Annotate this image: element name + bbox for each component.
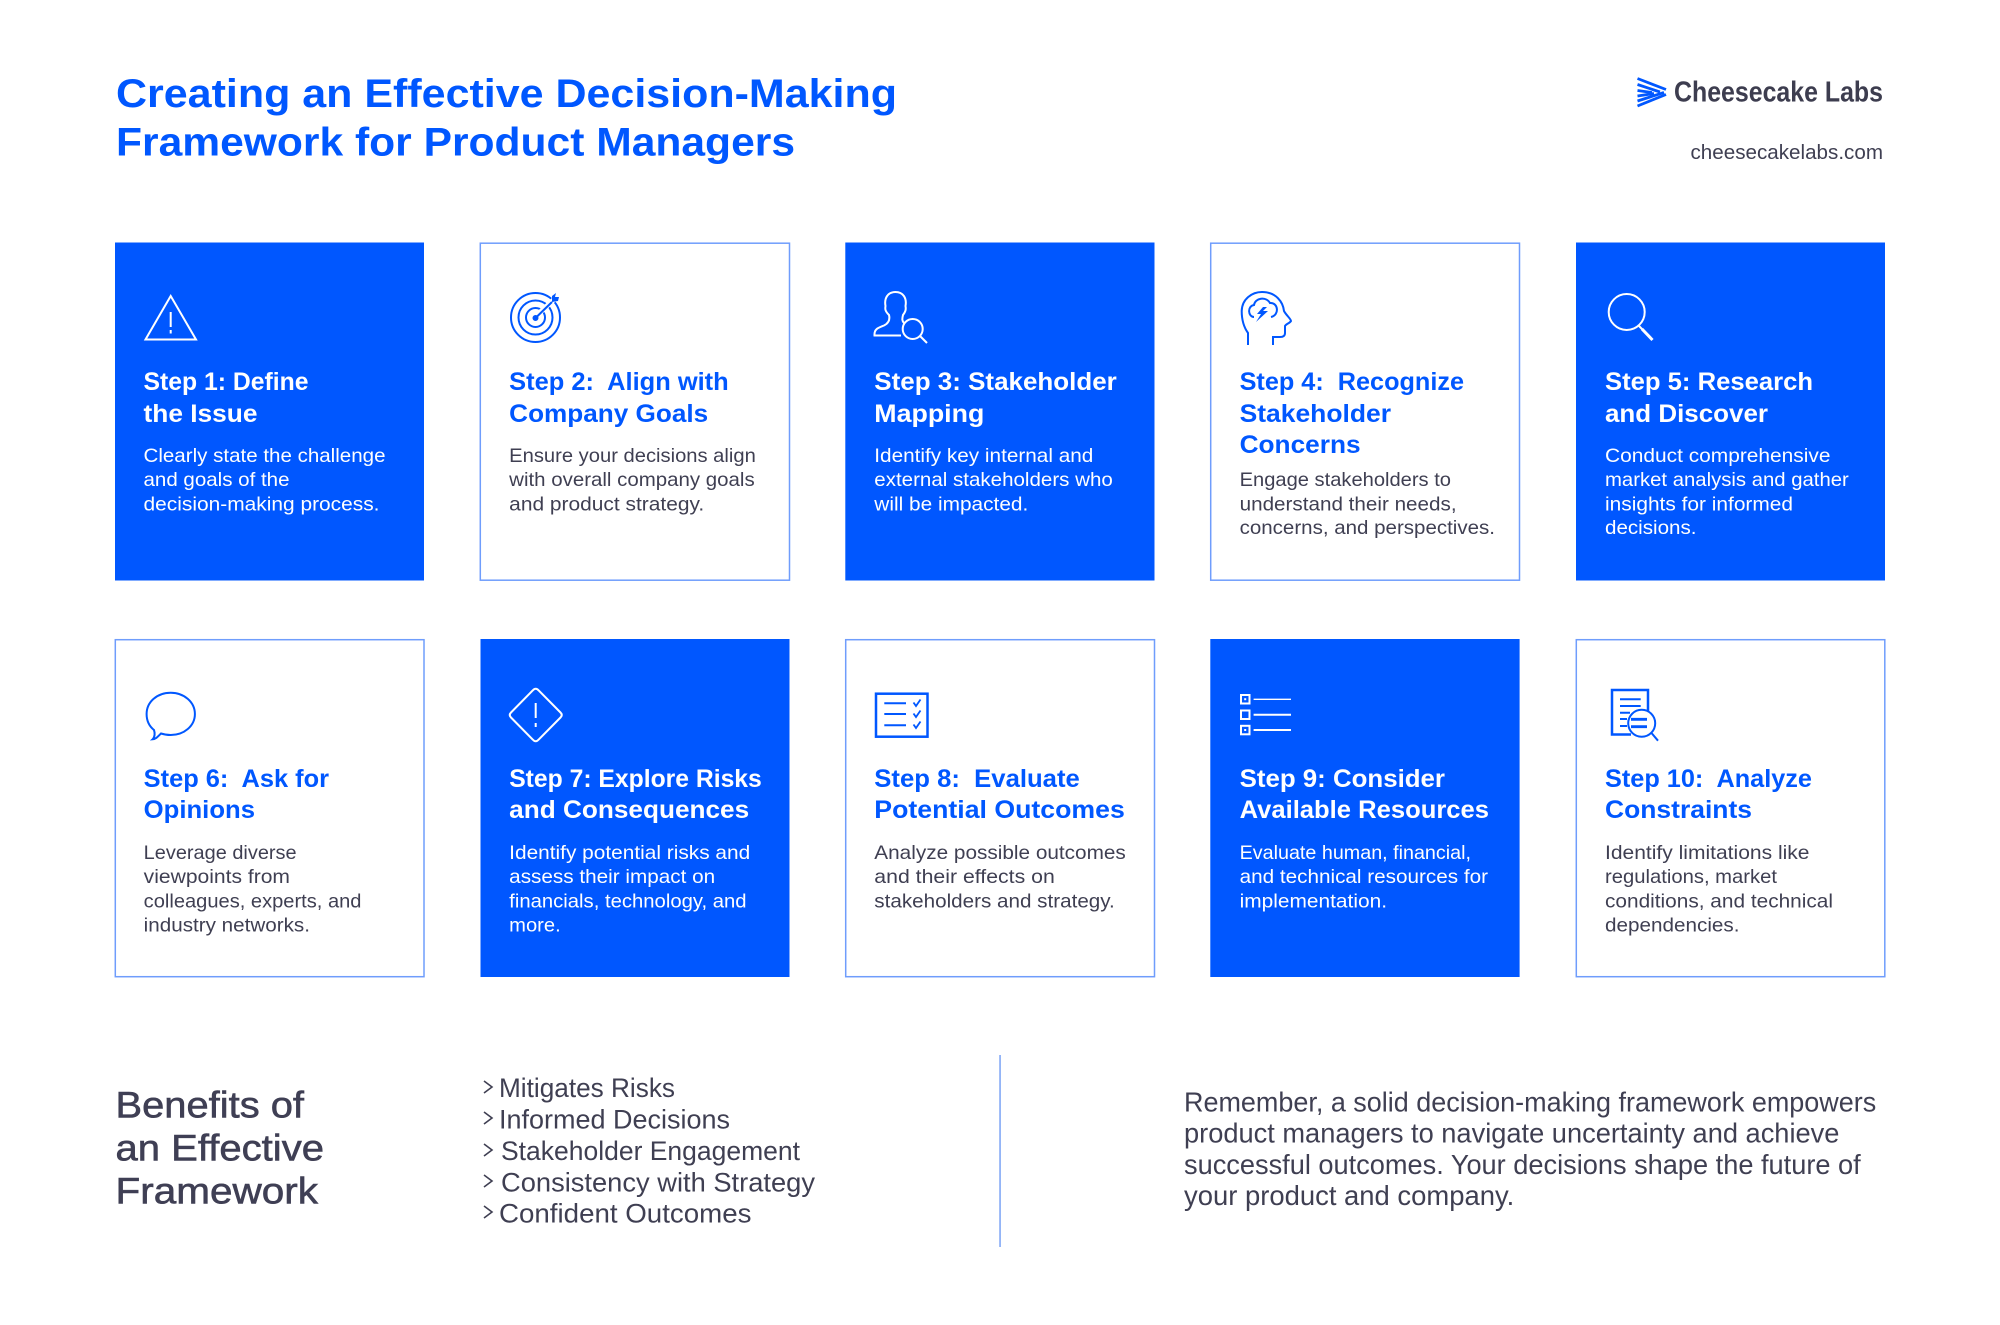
panel: step 10	[1576, 640, 1885, 977]
text: step 4 description: understand their needs,	[1240, 494, 1457, 516]
heading: step 4: Concerns	[1240, 431, 1361, 459]
heading: step 8	[874, 765, 1125, 824]
text: step 3 description: external stakeholders who	[874, 469, 1113, 491]
heading: step 9	[1240, 765, 1489, 824]
title	[116, 72, 897, 164]
text: step 10 description: conditions, and technical	[1605, 890, 1833, 912]
heading: step 2: Company Goals	[509, 400, 708, 428]
heading: step 5: Step 5: Research	[1605, 368, 1813, 396]
text: closing paragraph: successful outcomes. Your decisions shape the future of	[1184, 1149, 1861, 1180]
text: step 5 description: Conduct comprehensive	[1605, 445, 1830, 467]
text: step 3 description: Identify key internal and	[874, 445, 1093, 467]
text: step 5 description: insights for informed	[1605, 494, 1793, 516]
text: step 2 description	[508, 445, 756, 516]
heading: step 4: Stakeholder	[1240, 400, 1391, 428]
text: step 9 description: Evaluate human, financial,	[1240, 842, 1471, 864]
icon: warning triangle	[146, 296, 196, 340]
heading: step 1	[144, 368, 309, 428]
text: step 1 description: and goals of the	[144, 469, 290, 491]
heading: step 7: and Consequences	[509, 796, 749, 824]
text: step 10 description: Identify limitations like	[1605, 842, 1810, 864]
text: step 8 description	[874, 842, 1126, 912]
text: step 6 description: viewpoints from	[144, 866, 290, 888]
icon: speech bubble	[147, 693, 195, 739]
heading: step 1: the Issue	[144, 400, 258, 428]
text: closing paragraph	[1184, 1086, 1876, 1211]
text: closing paragraph: your product and company.	[1184, 1180, 1514, 1211]
heading: step 8: Potential Outcomes	[874, 796, 1125, 824]
text: step 10 description: regulations, market	[1605, 866, 1778, 888]
icon: target	[511, 293, 560, 342]
panel: step 9	[1210, 639, 1520, 977]
heading: step 3	[874, 368, 1117, 428]
icon: person with magnifier	[874, 292, 927, 343]
text: step 6 description	[144, 842, 362, 937]
heading: step 2: Step 2: Align with	[509, 368, 729, 396]
heading: step 5	[1605, 368, 1813, 428]
heading: step 6: Opinions	[144, 796, 255, 824]
text: step 3 description: will be impacted.	[873, 494, 1028, 516]
panel: step 5	[1576, 242, 1885, 580]
text: step 7 description	[509, 842, 750, 937]
panel: step 7	[480, 639, 790, 977]
icon: list chevrons	[484, 1081, 492, 1218]
text: step 2 description: with overall company goals	[508, 469, 755, 491]
text: step 4 description	[1240, 469, 1495, 539]
panel: step 6	[115, 640, 424, 977]
text: step 4 description: concerns, and perspectives.	[1240, 517, 1495, 539]
list: benefits: Informed Decisions	[499, 1104, 730, 1134]
text: step 8 description: Analyze possible outcomes	[874, 842, 1126, 864]
list: benefits: Consistency with Strategy	[501, 1168, 816, 1198]
list: benefits	[484, 1073, 816, 1228]
panel: step 4	[1211, 243, 1520, 580]
title: Creating an Effective Decision-Making	[116, 72, 897, 116]
heading: step 9: Available Resources	[1240, 796, 1489, 824]
text: closing paragraph: Remember, a solid decision-making framework empowers	[1184, 1086, 1876, 1118]
text: step 10 description	[1605, 842, 1833, 937]
text: step 2 description: and product strategy.	[509, 494, 704, 516]
icon: document with magnifier	[1612, 690, 1658, 741]
text: closing paragraph: product managers to navigate uncertainty and achieve	[1184, 1118, 1839, 1148]
list: benefits: Confident Outcomes	[499, 1198, 752, 1228]
heading: benefits: Benefits of	[116, 1084, 305, 1126]
panel: step 1	[115, 242, 424, 580]
heading: step 4: Step 4: Recognize	[1240, 368, 1464, 396]
title: Framework for Product Managers	[116, 120, 795, 164]
text: step 2 description: Ensure your decisions align	[509, 445, 756, 467]
heading: benefits	[116, 1084, 324, 1212]
heading: step 3: Mapping	[874, 400, 984, 428]
text: step 1 description	[144, 445, 386, 516]
text: step 7 description: assess their impact on	[509, 866, 715, 888]
heading: step 8: Step 8: Evaluate	[874, 765, 1080, 793]
text: step 7 description: financials, technology, and	[509, 890, 747, 912]
text: step 9 description: and technical resources for	[1240, 866, 1489, 888]
website url: cheesecakelabs.com	[1690, 141, 1883, 164]
text: step 3 description	[873, 445, 1113, 516]
heading: step 7: Step 7: Explore Risks	[509, 765, 762, 793]
heading: step 6	[144, 765, 329, 824]
list: benefits: Stakeholder Engagement	[501, 1136, 801, 1166]
heading: step 10: Step 10: Analyze	[1605, 765, 1812, 793]
text: step 9 description	[1240, 842, 1489, 912]
icon: checklist	[876, 694, 928, 737]
text: step 7 description: more.	[509, 915, 561, 937]
text: step 9 description: implementation.	[1240, 890, 1387, 912]
text: step 7 description: Identify potential risks and	[509, 842, 750, 864]
list: benefits: Mitigates Risks	[499, 1073, 675, 1103]
text: step 5 description: market analysis and gather	[1605, 469, 1849, 491]
text: step 4 description: Engage stakeholders to	[1240, 469, 1451, 491]
heading: step 4	[1240, 368, 1464, 459]
text: step 6 description: industry networks.	[144, 915, 310, 937]
icon: logo stripes	[1638, 78, 1666, 106]
text: step 8 description: and their effects on	[874, 866, 1055, 888]
icon: magnifier	[1609, 294, 1652, 340]
text: step 5 description: decisions.	[1605, 517, 1696, 539]
heading: benefits: Framework	[116, 1170, 319, 1212]
panel: step 3	[845, 242, 1154, 580]
heading: step 9: Step 9: Consider	[1240, 765, 1445, 793]
heading: step 7	[509, 765, 762, 824]
heading: step 10	[1605, 765, 1812, 824]
text: step 10 description: dependencies.	[1605, 915, 1740, 937]
text: step 5 description	[1605, 445, 1849, 539]
panel: step 2	[480, 243, 790, 580]
text: step 1 description: decision-making process.	[144, 494, 380, 516]
heading: step 6: Step 6: Ask for	[144, 765, 329, 793]
text: step 6 description: Leverage diverse	[144, 842, 297, 864]
icon: warning diamond	[510, 689, 562, 741]
text: step 8 description: stakeholders and strategy.	[874, 890, 1115, 912]
text: step 1 description: Clearly state the challenge	[144, 445, 386, 467]
icon: bullet list	[1241, 695, 1291, 734]
icon: head with storm cloud	[1242, 292, 1291, 345]
logo: Cheesecake Labs: Cheesecake Labs	[1674, 77, 1883, 109]
heading: benefits: an Effective	[116, 1128, 324, 1168]
heading: step 1: Step 1: Define	[144, 368, 309, 396]
text: step 6 description: colleagues, experts, and	[144, 890, 362, 912]
heading: step 2	[509, 368, 729, 428]
heading: step 5: and Discover	[1605, 400, 1768, 428]
panel: step 8	[846, 640, 1154, 977]
heading: step 10: Constraints	[1605, 796, 1752, 824]
heading: step 3: Step 3: Stakeholder	[874, 368, 1117, 396]
